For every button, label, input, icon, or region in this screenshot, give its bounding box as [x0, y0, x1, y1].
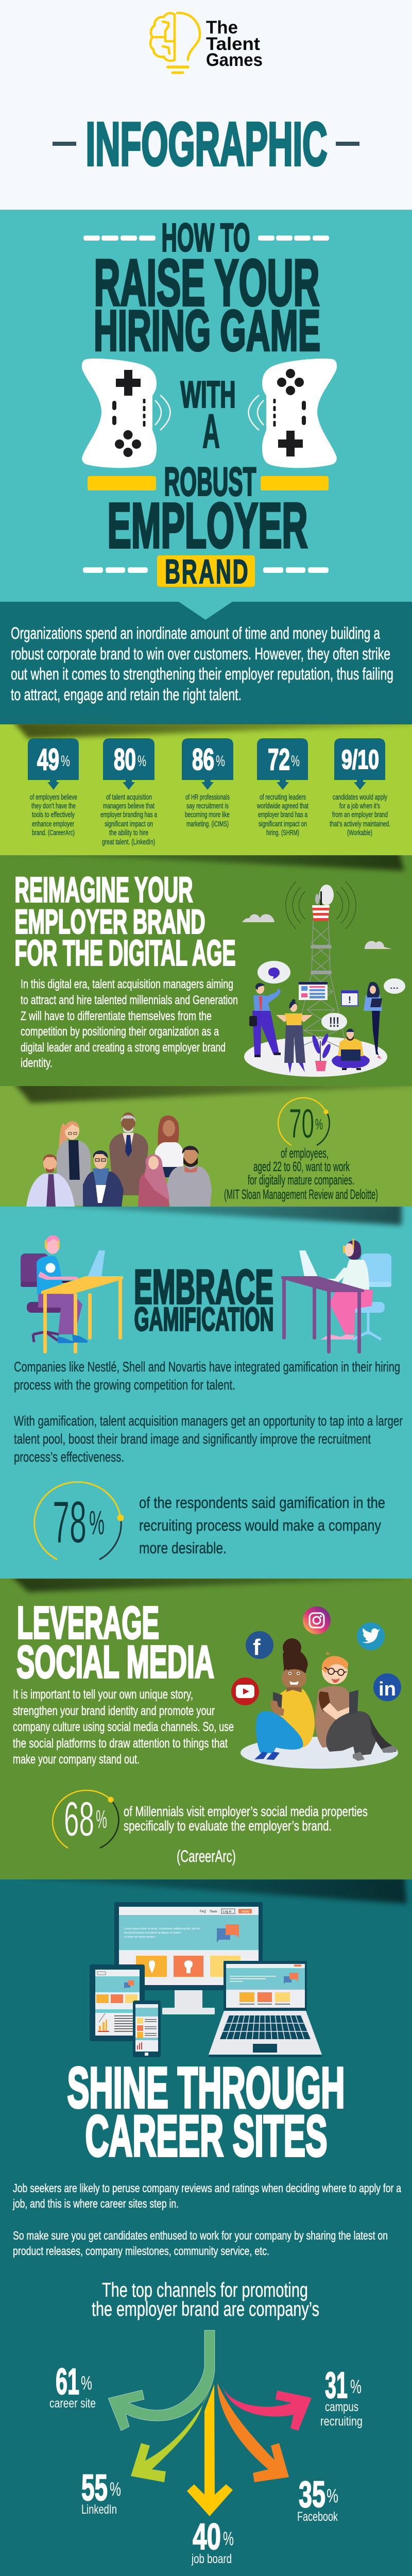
desktop monitor: Lorem ipsum dolor sit amet, consectetur adipiscing elit, sed do [124, 1927, 200, 1930]
tablet [90, 1964, 145, 2041]
heading: EMPLOYER BRAND [14, 903, 205, 941]
stat card: 86% [182, 738, 233, 828]
label: 31% campus recruiting: 31 [325, 2365, 348, 2406]
desktop monitor [114, 1902, 263, 2014]
caption: 68 percent: specifically to evaluate the employer’s brand. [124, 1818, 332, 1834]
caption: 78 percent: more desirable. [139, 1539, 227, 1557]
title: how to raise your hiring game: HOW TO [162, 215, 250, 260]
chart heading: The top channels for promoting [102, 2279, 308, 2301]
panel: embrace gamification [0, 1204, 412, 1579]
label: 35% Facebook: % [327, 2485, 338, 2507]
body text: In this digital era, talent acquisition managers aiming [21, 977, 233, 991]
body text: process’s effectiveness. [14, 1449, 124, 1465]
stat card: 9/10: 9/10 [341, 745, 379, 775]
stat card: 49%: tools to effectively [32, 810, 75, 819]
heading: embrace gamification: EMBRACE [134, 1260, 273, 1314]
heading [16, 1597, 214, 1687]
man [315, 1652, 398, 1761]
body text: Z will have to differentiate themselves from the [21, 1009, 212, 1023]
caption: 70 percent: of employees, [281, 1145, 329, 1161]
caption: 68 percent [124, 1804, 368, 1866]
body text: It is important to tell your own unique story, [13, 1687, 193, 1702]
panel: hero title [0, 210, 412, 602]
panel: introduction [0, 602, 412, 724]
logo: The Talent Games: The [206, 18, 238, 38]
stat card: 86%: of HR professionals [185, 793, 230, 802]
desktop monitor: Ut enim ad minim veniam [124, 1936, 155, 1939]
heading [67, 2056, 345, 2168]
body text: product releases, company milestones, community service, etc. [13, 2244, 269, 2258]
seated man with laptop [332, 1028, 370, 1070]
panel: shine through career sites [0, 1876, 412, 2576]
illustration: left gamer at desk [21, 1235, 123, 1353]
body text: digital leader and creating a strong employer brand [21, 1041, 226, 1055]
body text [21, 977, 238, 1070]
icon: instagram [303, 1606, 331, 1634]
stat card: 49% [28, 738, 79, 837]
white dashes top [83, 235, 329, 241]
browser windows: ! [348, 995, 351, 1005]
title: how to raise your hiring game: A [202, 404, 220, 458]
label: 61% career site: career site [49, 2396, 96, 2411]
title: how to raise your hiring game [94, 215, 320, 562]
label: 61% career site: 61 [56, 2362, 79, 2402]
heading: embrace gamification [134, 1260, 274, 1337]
label: 35% Facebook: Facebook [297, 2510, 338, 2524]
stat card: 86%: becoming more like [185, 810, 230, 819]
icon: twitter [357, 1622, 385, 1650]
title: how to raise your hiring game: ROBUST [164, 459, 256, 504]
stat card: 80%: great talent. (LinkedIn) [102, 838, 155, 846]
arrow: campus recruiting [223, 2386, 312, 2431]
progress ring: 70%: % [315, 1116, 323, 1133]
woman with glasses [57, 1121, 91, 1206]
body text [13, 1687, 234, 1767]
stat card: 49%: enhance employer [32, 820, 74, 828]
desktop monitor: Log in [223, 1910, 231, 1913]
floor ellipse [244, 1037, 387, 1077]
stat card: 9/10: (Workable) [347, 828, 372, 837]
label: 55% LinkedIn: LinkedIn [81, 2502, 117, 2517]
icon: linkedin: in [379, 1679, 396, 1700]
heading: SOCIAL MEDIA [16, 1636, 214, 1687]
man with beard in grey sweater [167, 1146, 212, 1207]
standing woman with tablet [364, 982, 382, 1059]
icon: facebook: f [253, 1635, 261, 1660]
stat card: 49%: 49 [37, 743, 59, 776]
progress ring: 68%: 68 [64, 1792, 94, 1846]
caption: 70 percent [224, 1145, 378, 1202]
label: 31% campus recruiting [320, 2365, 363, 2429]
heading: LEVERAGE [17, 1597, 159, 1648]
illustration: responsive devices [90, 1902, 322, 2057]
label: 55% LinkedIn: 55 [81, 2468, 108, 2509]
chart heading: the employer brand are company’s [92, 2298, 319, 2320]
desktop monitor: Team [210, 1910, 217, 1913]
progress ring: 70% [278, 1098, 330, 1146]
logo: The Talent Games [150, 13, 263, 73]
logo: The Talent Games: Games [206, 50, 263, 70]
label: 35% Facebook: 35 [299, 2475, 325, 2515]
speech bubbles: !!! [329, 1014, 339, 1030]
stat card: 49%: % [61, 753, 70, 770]
stat card: 86%: say recruitment is [186, 802, 229, 810]
body text: make your company stand out. [13, 1752, 140, 1767]
stat card: 49%: brand. (CareerArc) [32, 828, 75, 837]
progress ring: 70%: 70 [289, 1100, 314, 1146]
icon: youtube [231, 1677, 259, 1705]
label: 40% job board: % [223, 2528, 234, 2550]
speech bubbles: ... [390, 982, 399, 990]
body text: process with the growing competition for talent. [14, 1377, 235, 1393]
label: 55% LinkedIn: % [110, 2479, 121, 2500]
panel: leverage social media [0, 1575, 412, 1879]
stat card: 80%: % [138, 753, 146, 770]
stat card: 9/10: from an employer brand [332, 810, 388, 819]
body text: strengthen your brand identity and promote your [13, 1704, 215, 1718]
stat card: 80%: significant impact on [105, 820, 153, 828]
progress ring: 78%: % [89, 1503, 105, 1541]
stat card: 80% [100, 738, 157, 846]
body text [12, 2181, 401, 2258]
stat card: 80%: 80 [114, 743, 136, 776]
pointer triangle [179, 602, 232, 620]
icon: left game controller [82, 359, 170, 468]
arrow: job board [187, 2384, 233, 2516]
phone [133, 2001, 161, 2057]
icon: facebook [246, 1631, 273, 1660]
stat card: 9/10: for a job when it’s [339, 802, 380, 810]
yellow bars [88, 476, 329, 490]
label: 61% career site: % [81, 2372, 92, 2394]
caption: 68 percent: (CareerArc) [177, 1847, 236, 1866]
satellite dish and striped box [312, 885, 334, 921]
clouds [242, 914, 274, 922]
panel: reimagine your employer brand [0, 852, 412, 1086]
badge: BRAND: BRAND [165, 552, 248, 590]
woman [254, 1638, 315, 1760]
stat card: 72%: of recruiting leaders [260, 793, 306, 802]
title: how to raise your hiring game: WITH [180, 374, 236, 415]
stat card: 72%: worldwide agreed that [256, 802, 309, 810]
caption: 78 percent [139, 1494, 385, 1557]
arrow: LinkedIn [131, 2391, 210, 2482]
body text [14, 1359, 403, 1465]
body text: to attract and hire talented millennials and Generation [21, 993, 238, 1007]
stat card: 80%: of talent acquisition [106, 793, 152, 802]
logo: The Talent Games: Talent [206, 34, 260, 54]
stat card: 49%: they don’t have the [31, 802, 76, 810]
signal rings [286, 882, 356, 929]
icon: brain light bulb [150, 13, 200, 73]
illustration: diverse team [26, 1112, 212, 1207]
body text: competition by positioning their organization as a [21, 1025, 219, 1039]
browser windows [299, 982, 358, 1006]
panel: statistics [0, 721, 412, 855]
stat card: 86%: marketing. (iCIMS) [186, 820, 229, 828]
heading: FOR THE DIGITAL AGE [14, 933, 236, 973]
white dashes bottom [83, 567, 329, 573]
man with bag [249, 983, 281, 1057]
man in light shirt [26, 1154, 75, 1207]
progress ring: 68%: % [96, 1805, 107, 1834]
label: 31% campus recruiting: % [350, 2376, 362, 2398]
stat card: 72%: % [291, 753, 300, 770]
woman in yellow [276, 999, 313, 1073]
older man [109, 1112, 148, 1195]
desktop monitor: Apply [242, 1910, 249, 1913]
heading: REIMAGINE YOUR [14, 870, 193, 910]
chart heading [92, 2279, 319, 2320]
stat card: 72%: hiring. (SHRM) [266, 828, 299, 837]
progress ring: 78%: 78 [53, 1489, 87, 1555]
heading: embrace gamification: GAMIFICATION [134, 1300, 274, 1337]
intro text: to attract, engage and retain the right talent. [11, 685, 242, 704]
stat card: 80%: employer branding has a [100, 810, 157, 819]
stat card: 80%: managers believe that [103, 802, 155, 810]
stat card: 80%: the ability to hire [109, 828, 148, 837]
icon: linkedin [373, 1673, 401, 1701]
label: 40% job board: job board [191, 2552, 232, 2566]
arrow: Facebook [217, 2383, 289, 2482]
woman with long hair [155, 1115, 184, 1177]
stat card: 86%: % [216, 753, 225, 770]
label: 31% campus recruiting: campus [325, 2400, 358, 2414]
illustration: two people with phones [241, 1638, 398, 1769]
body text: the social platforms to draw attention to things that [13, 1736, 228, 1751]
label: 40% job board: 40 [193, 2517, 221, 2557]
body text: job, and this is where career sites step in. [12, 2197, 179, 2210]
desktop monitor: FAQ [200, 1910, 206, 1913]
body text: company culture using social media channels. So, use [13, 1720, 234, 1734]
panel: 70 percent [0, 1082, 412, 1207]
stat card: 9/10: candidates would apply [333, 793, 387, 802]
woman in hijab [138, 1155, 169, 1207]
stat card: 72%: 72 [268, 743, 290, 776]
label: 31% campus recruiting: recruiting [320, 2414, 363, 2429]
desktop monitor: eiusmod tempor incididunt ut labore et dolore [124, 1931, 181, 1935]
tower [293, 921, 347, 1048]
intro text [11, 624, 393, 704]
arrow: career site [108, 2330, 215, 2431]
stat card: 86%: 86 [192, 743, 214, 776]
body text: identity. [21, 1056, 53, 1070]
stat card: 72%: significant impact on [259, 820, 307, 828]
stat card: 72% [256, 738, 309, 837]
laptop [209, 1961, 322, 2057]
heading [14, 870, 236, 973]
stat card: 9/10 [330, 738, 390, 837]
stat card: 72%: employer brand has a [258, 810, 307, 819]
stat card: 49%: of employers believe [30, 793, 77, 802]
arrow chart: top channels [49, 2330, 363, 2566]
icon: right game controller [248, 359, 337, 468]
illustration: people around a communication tower [242, 882, 405, 1077]
illustration: right gamer at desk [281, 1239, 391, 1353]
potted plant [311, 1033, 332, 1071]
man in navy jacket [83, 1150, 124, 1207]
progress ring: 78% [35, 1482, 124, 1560]
speech bubbles [258, 961, 405, 1030]
